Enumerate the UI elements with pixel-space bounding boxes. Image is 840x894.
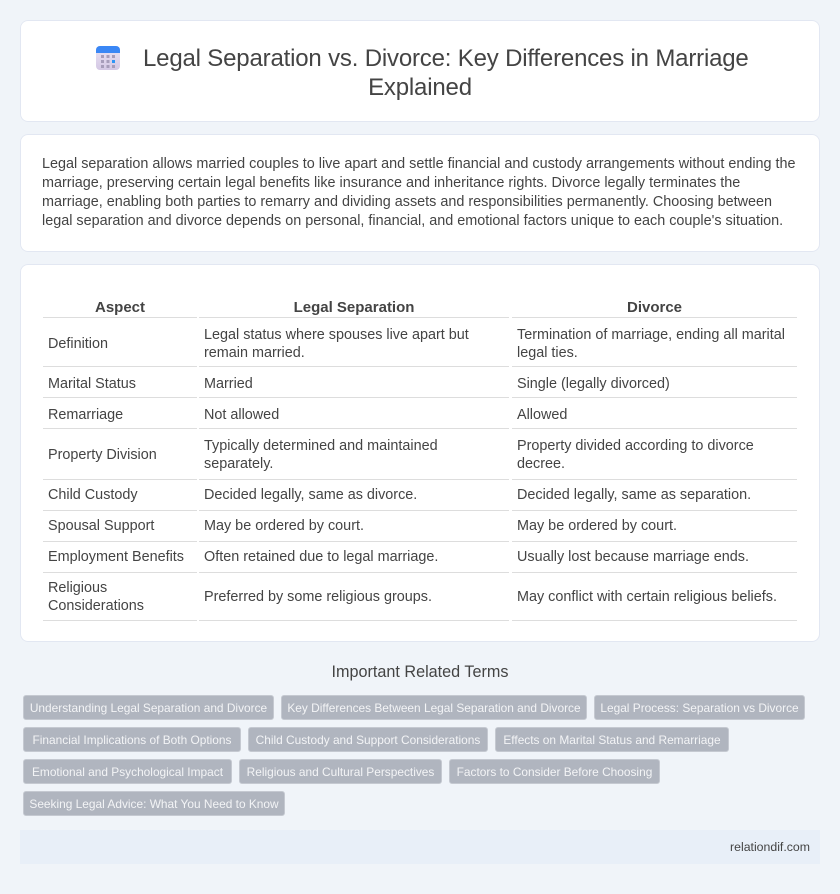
tag: Factors to Consider Before Choosing: [457, 765, 652, 779]
text block: introduction: marriage, enabling both parties to remarry and dividing assets and responsibilities permanently. Choosing between: [42, 194, 772, 210]
table row: employment benefits: Often retained due to legal marriage.: [204, 549, 438, 565]
table row: religious considerations: May conflict with certain religious beliefs.: [517, 589, 777, 605]
tag: [23, 759, 232, 784]
table row: spousal support: May be ordered by court.: [517, 518, 677, 534]
tag: [23, 695, 274, 720]
table header: [43, 299, 797, 318]
tag: Financial Implications of Both Options: [33, 733, 231, 747]
heading: important related terms: Important Related Terms: [332, 663, 508, 681]
icon: calendar: [96, 46, 120, 70]
table row: property division: decree.: [517, 456, 565, 472]
table row: remarriage: Remarriage: [48, 407, 123, 423]
table row: child custody: Decided legally, same as separation.: [517, 487, 751, 503]
table row: remarriage: Not allowed: [204, 407, 279, 423]
table row: employment benefits: Employment Benefits: [48, 549, 184, 565]
table row: definition: Definition: [48, 336, 108, 352]
table row: spousal support: [43, 518, 797, 542]
text block: introduction: legal separation and divorce depends on personal, financial, and emotional factors unique to each couple's situation.: [42, 213, 783, 229]
title: Legal Separation vs. Divorce: Key Differences in Marriage: [143, 45, 749, 72]
table row: marital status: Marital Status: [48, 376, 136, 392]
text block: introduction: [42, 156, 796, 229]
panel: title header: [20, 20, 820, 122]
tag: Seeking Legal Advice: What You Need to Know: [29, 797, 279, 811]
table row: marital status: Married: [204, 376, 253, 392]
table header: Legal Separation: [294, 299, 414, 316]
table row: child custody: Decided legally, same as divorce.: [204, 487, 417, 503]
table header: Aspect: [95, 299, 145, 316]
tag: Emotional and Psychological Impact: [32, 765, 223, 779]
table row: child custody: [43, 487, 797, 511]
title: [143, 45, 749, 101]
table row: property division: Property Division: [48, 447, 157, 463]
table row: definition: remain married.: [204, 345, 305, 361]
table row: religious considerations: Religious: [48, 580, 107, 596]
tag: [239, 759, 442, 784]
table row: property division: [43, 438, 797, 480]
table row: religious considerations: Considerations: [48, 598, 144, 614]
table row: property division: separately.: [204, 456, 273, 472]
tag: [594, 695, 805, 720]
tag: Legal Process: Separation vs Divorce: [600, 701, 799, 715]
tag: Understanding Legal Separation and Divorce: [30, 701, 267, 715]
tag: Religious and Cultural Perspectives: [247, 765, 434, 779]
table row: remarriage: [43, 407, 797, 429]
text block: introduction: Legal separation allows married couples to live apart and settle financial and custody arrangements without ending the: [42, 156, 796, 172]
text block: introduction: marriage, preserving certain legal benefits like insurance and inheritance rights. Divorce legally terminates the: [42, 175, 740, 191]
tag: [248, 727, 488, 752]
title: Explained: [368, 74, 472, 101]
tag: Child Custody and Support Considerations: [256, 733, 480, 747]
panel: introduction text: [20, 134, 820, 252]
table row: spousal support: Spousal Support: [48, 518, 154, 534]
tag: [281, 695, 587, 720]
table row: employment benefits: Usually lost because marriage ends.: [517, 549, 749, 565]
table row: marital status: [43, 376, 797, 398]
tag: [495, 727, 729, 752]
tag: Effects on Marital Status and Remarriage: [503, 733, 721, 747]
table row: marital status: Single (legally divorced): [517, 376, 670, 392]
table row: religious considerations: Preferred by some religious groups.: [204, 589, 432, 605]
table row: definition: legal ties.: [517, 345, 578, 361]
table row: employment benefits: [43, 549, 797, 573]
table header: Divorce: [627, 299, 682, 316]
table row: definition: [43, 327, 797, 367]
table row: spousal support: May be ordered by court.: [204, 518, 364, 534]
tag: [449, 759, 660, 784]
table row: remarriage: Allowed: [517, 407, 567, 423]
table row: property division: Typically determined and maintained: [204, 438, 438, 454]
table row: definition: Termination of marriage, ending all marital: [517, 327, 785, 343]
tag: [23, 727, 241, 752]
tag: Key Differences Between Legal Separation and Divorce: [287, 701, 581, 715]
table row: child custody: Child Custody: [48, 487, 138, 503]
panel: related term tags: [23, 695, 805, 816]
footer text: site name: relationdif.com: [730, 840, 810, 854]
table row: religious considerations: [43, 580, 797, 621]
table row: property division: Property divided according to divorce: [517, 438, 754, 454]
tag: [23, 791, 285, 816]
panel: comparison table: [20, 264, 820, 642]
table row: definition: Legal status where spouses live apart but: [204, 327, 469, 343]
footer bar: [20, 830, 820, 864]
